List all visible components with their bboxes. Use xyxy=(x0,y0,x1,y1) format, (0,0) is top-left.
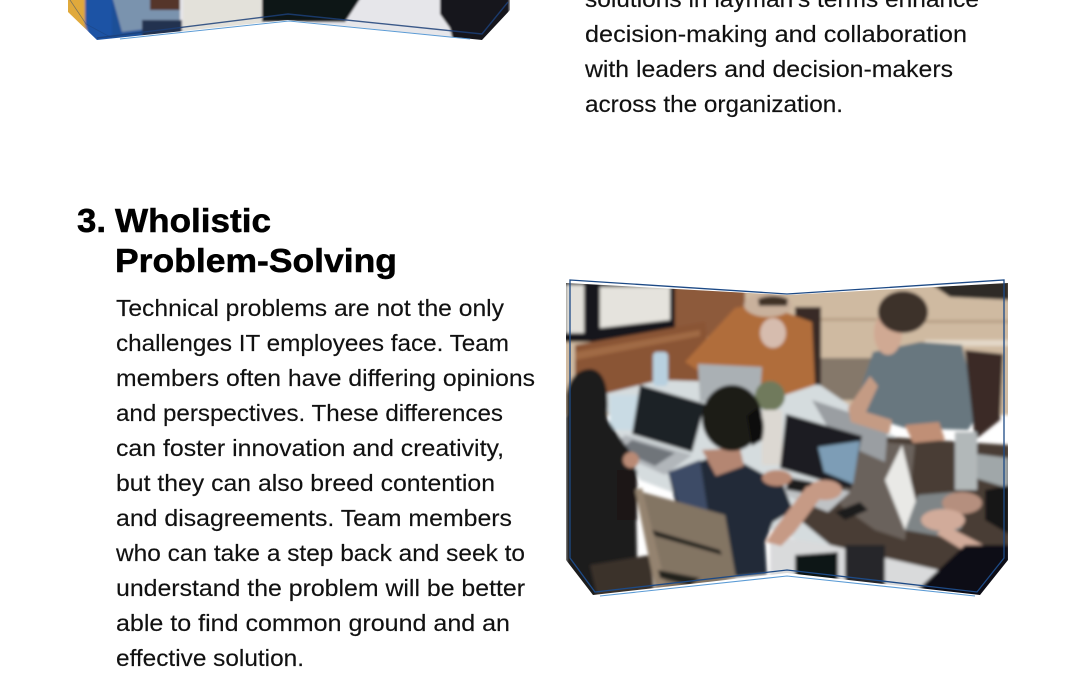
under table xyxy=(767,538,942,588)
heading: 3. Wholistic Problem-Solving: Problem-Solving xyxy=(115,242,397,279)
table pale area xyxy=(600,380,900,560)
text block: problem-solving paragraph xyxy=(115,295,535,671)
water bottle xyxy=(653,352,668,386)
text block: problem-solving paragraph: and perspectives. These differences xyxy=(116,400,503,426)
back laptop xyxy=(698,364,762,402)
arm and hands xyxy=(766,486,825,546)
photo: IT team working on laptops around a table xyxy=(560,275,1015,604)
hands at lower right xyxy=(985,485,1010,535)
log wall xyxy=(560,275,1015,415)
chair xyxy=(641,490,738,587)
dark table xyxy=(800,435,1010,580)
person at left xyxy=(566,368,640,595)
wood wainscot xyxy=(573,325,709,394)
text block: problem-solving paragraph: able to find common ground and an xyxy=(116,610,510,636)
phone xyxy=(835,502,868,520)
man in grey t-shirt xyxy=(853,342,978,430)
heading: 3. Wholistic Problem-Solving: Wholistic xyxy=(115,202,271,239)
text block: problem-solving paragraph: effective solution. xyxy=(116,645,304,671)
right laptop xyxy=(885,445,918,530)
text block: right column paragraph continued xyxy=(584,0,979,117)
heading: 3. Wholistic Problem-Solving xyxy=(77,202,397,279)
text block: problem-solving paragraph: understand the problem will be better xyxy=(116,575,525,601)
text block: right column paragraph continued: with leaders and decision-makers xyxy=(584,56,953,82)
text block: problem-solving paragraph: Technical problems are not the only xyxy=(116,295,504,321)
glass xyxy=(955,432,977,490)
text block: problem-solving paragraph: members often have differing opinions xyxy=(116,365,535,391)
photo: business team, cropped at top xyxy=(68,0,510,40)
floor behind xyxy=(815,358,875,400)
man with headphones xyxy=(668,457,793,579)
text block: right column paragraph continued: across the organization. xyxy=(585,91,843,117)
text block: problem-solving paragraph: and disagreements. Team members xyxy=(116,505,512,531)
heading: 3. Wholistic Problem-Solving: 3. xyxy=(77,202,106,239)
plant xyxy=(755,381,785,411)
text block: right column paragraph continued: decision-making and collaboration xyxy=(585,21,967,47)
man in orange shirt xyxy=(685,303,815,395)
text block: problem-solving paragraph: challenges IT employees face. Team xyxy=(116,330,509,356)
left laptop xyxy=(632,385,705,452)
centre laptop xyxy=(780,414,862,489)
text block: problem-solving paragraph: but they can also breed contention xyxy=(116,470,495,496)
text block: problem-solving paragraph: can foster innovation and creativity, xyxy=(116,435,504,461)
text block: problem-solving paragraph: who can take a step back and seek to xyxy=(115,540,525,566)
window xyxy=(566,283,680,345)
dark sleeves xyxy=(915,545,1010,600)
